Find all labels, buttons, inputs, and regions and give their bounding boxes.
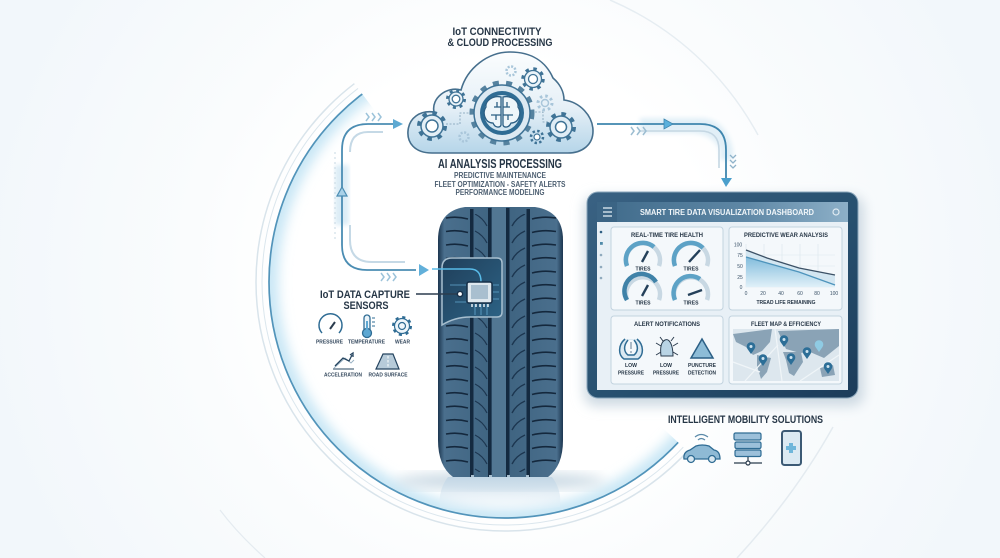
heading: IoT data capture sensors: IoT DATA CAPTURE bbox=[320, 289, 410, 301]
panel: predictive wear analysis: 25 bbox=[737, 275, 743, 281]
panel: alert notifications: DETECTION bbox=[688, 370, 716, 376]
panel: predictive wear analysis: 50 bbox=[737, 264, 743, 270]
map pins bbox=[747, 335, 832, 374]
panel: real-time tire health: TIRES bbox=[684, 266, 699, 272]
panel: predictive wear analysis: 0 bbox=[745, 291, 748, 297]
panel: predictive wear analysis: TREAD LIFE REMAINING bbox=[756, 300, 816, 306]
label: pressure: PRESSURE bbox=[316, 340, 343, 346]
panel: alert notifications: LOW bbox=[625, 363, 638, 369]
shoulder sipes left bbox=[445, 214, 469, 472]
icon: wear gear bbox=[394, 318, 410, 334]
panel: alert notifications: LOW bbox=[660, 363, 673, 369]
panel: predictive wear analysis: 100 bbox=[734, 242, 742, 248]
cloud shape bbox=[408, 52, 593, 153]
main circular arc bbox=[268, 93, 679, 519]
inner glow of the circle bbox=[270, 94, 678, 518]
panel: predictive wear analysis: 40 bbox=[778, 291, 784, 297]
grooves bbox=[470, 208, 530, 477]
heading: AI analysis processing: FLEET OPTIMIZATION - SAFETY ALERTS bbox=[434, 180, 566, 189]
panel: predictive wear analysis: 0 bbox=[740, 285, 743, 291]
panel: alert notifications bbox=[611, 316, 723, 384]
heading: AI analysis processing bbox=[434, 157, 566, 197]
inner rib pattern bbox=[474, 214, 488, 472]
label: road surface: ROAD SURFACE bbox=[368, 372, 408, 378]
icon: pressure gauge bbox=[319, 314, 342, 333]
icon: acceleration bbox=[333, 353, 354, 369]
heading: IoT data capture sensors: SENSORS bbox=[344, 300, 388, 312]
title: IoT connectivity: IoT CONNECTIVITY bbox=[452, 26, 542, 38]
dashboard header bbox=[597, 202, 848, 222]
decorative rings bbox=[255, 83, 684, 532]
icon: connected car bbox=[684, 434, 720, 462]
title: IoT connectivity bbox=[448, 26, 552, 49]
shoulder sipes right bbox=[531, 214, 557, 472]
brain gear bbox=[472, 83, 532, 143]
right flow arrow: cloud to dashboard bbox=[597, 118, 736, 187]
icon: warning bug bbox=[656, 337, 678, 356]
label: wear: WEAR bbox=[395, 340, 410, 346]
panel: fleet map: FLEET MAP & EFFICIENCY bbox=[751, 321, 822, 328]
heading: AI analysis processing: PERFORMANCE MODELING bbox=[456, 188, 544, 197]
icon: thermometer bbox=[362, 315, 375, 338]
heading: AI analysis processing: PREDICTIVE MAINTENANCE bbox=[454, 171, 547, 180]
left flow arrow: tire to cloud bbox=[335, 113, 429, 281]
heading: IoT data capture sensors bbox=[320, 289, 410, 312]
panel: alert notifications: PUNCTURE bbox=[688, 363, 716, 369]
centre rib bbox=[492, 207, 506, 477]
panel: predictive wear analysis: 100 bbox=[830, 291, 838, 297]
title: IoT connectivity: & CLOUD PROCESSING bbox=[448, 37, 552, 49]
icon: low pressure tire bbox=[620, 339, 642, 359]
panel: real-time tire health bbox=[611, 227, 723, 310]
cloud with gears and brain bbox=[408, 52, 593, 153]
label: temperature: TEMPERATURE bbox=[348, 340, 385, 346]
sidebar dots bbox=[600, 231, 603, 279]
panel: predictive wear analysis bbox=[729, 227, 842, 310]
heading: AI analysis processing: AI ANALYSIS PROCESSING bbox=[438, 157, 562, 171]
panel: fleet map bbox=[729, 316, 842, 384]
panel: real-time tire health: REAL-TIME TIRE HEALTH bbox=[631, 232, 703, 239]
connector dashes bbox=[446, 112, 548, 124]
panel: alert notifications: ALERT NOTIFICATIONS bbox=[634, 321, 701, 328]
decorative outer arcs bbox=[220, 0, 833, 558]
tire bbox=[438, 207, 563, 477]
sensor window with chip bbox=[432, 258, 502, 325]
tire reflection bbox=[395, 472, 605, 510]
panel: alert notifications: PRESSURE bbox=[618, 370, 644, 376]
icon: road surface bbox=[376, 354, 399, 369]
panel: predictive wear analysis: 80 bbox=[814, 291, 820, 297]
dashboard tablet bbox=[584, 192, 864, 406]
gears bbox=[419, 69, 574, 143]
panel: predictive wear analysis: 60 bbox=[797, 291, 803, 297]
icon: warning triangle bbox=[691, 339, 713, 358]
heading: intelligent mobility solutions: INTELLIGENT MOBILITY SOLUTIONS bbox=[668, 414, 823, 426]
continents bbox=[733, 329, 839, 379]
panel: real-time tire health: TIRES bbox=[636, 300, 651, 306]
icon: smartphone bbox=[782, 431, 801, 465]
icon: network server bbox=[734, 433, 762, 465]
panel: predictive wear analysis: PREDICTIVE WEAR ANALYSIS bbox=[744, 232, 829, 239]
label: acceleration: ACCELERATION bbox=[324, 372, 362, 378]
panel: real-time tire health: TIRES bbox=[684, 300, 699, 306]
dashboard header: SMART TIRE DATA VISUALIZATION DASHBOARD bbox=[640, 208, 814, 217]
sensor callout line bbox=[416, 291, 463, 297]
panel: predictive wear analysis: 20 bbox=[760, 291, 766, 297]
panel: predictive wear analysis: 75 bbox=[737, 253, 743, 259]
brain bbox=[484, 97, 520, 127]
panel: real-time tire health: TIRES bbox=[636, 266, 651, 272]
panel: alert notifications: PRESSURE bbox=[653, 370, 679, 376]
